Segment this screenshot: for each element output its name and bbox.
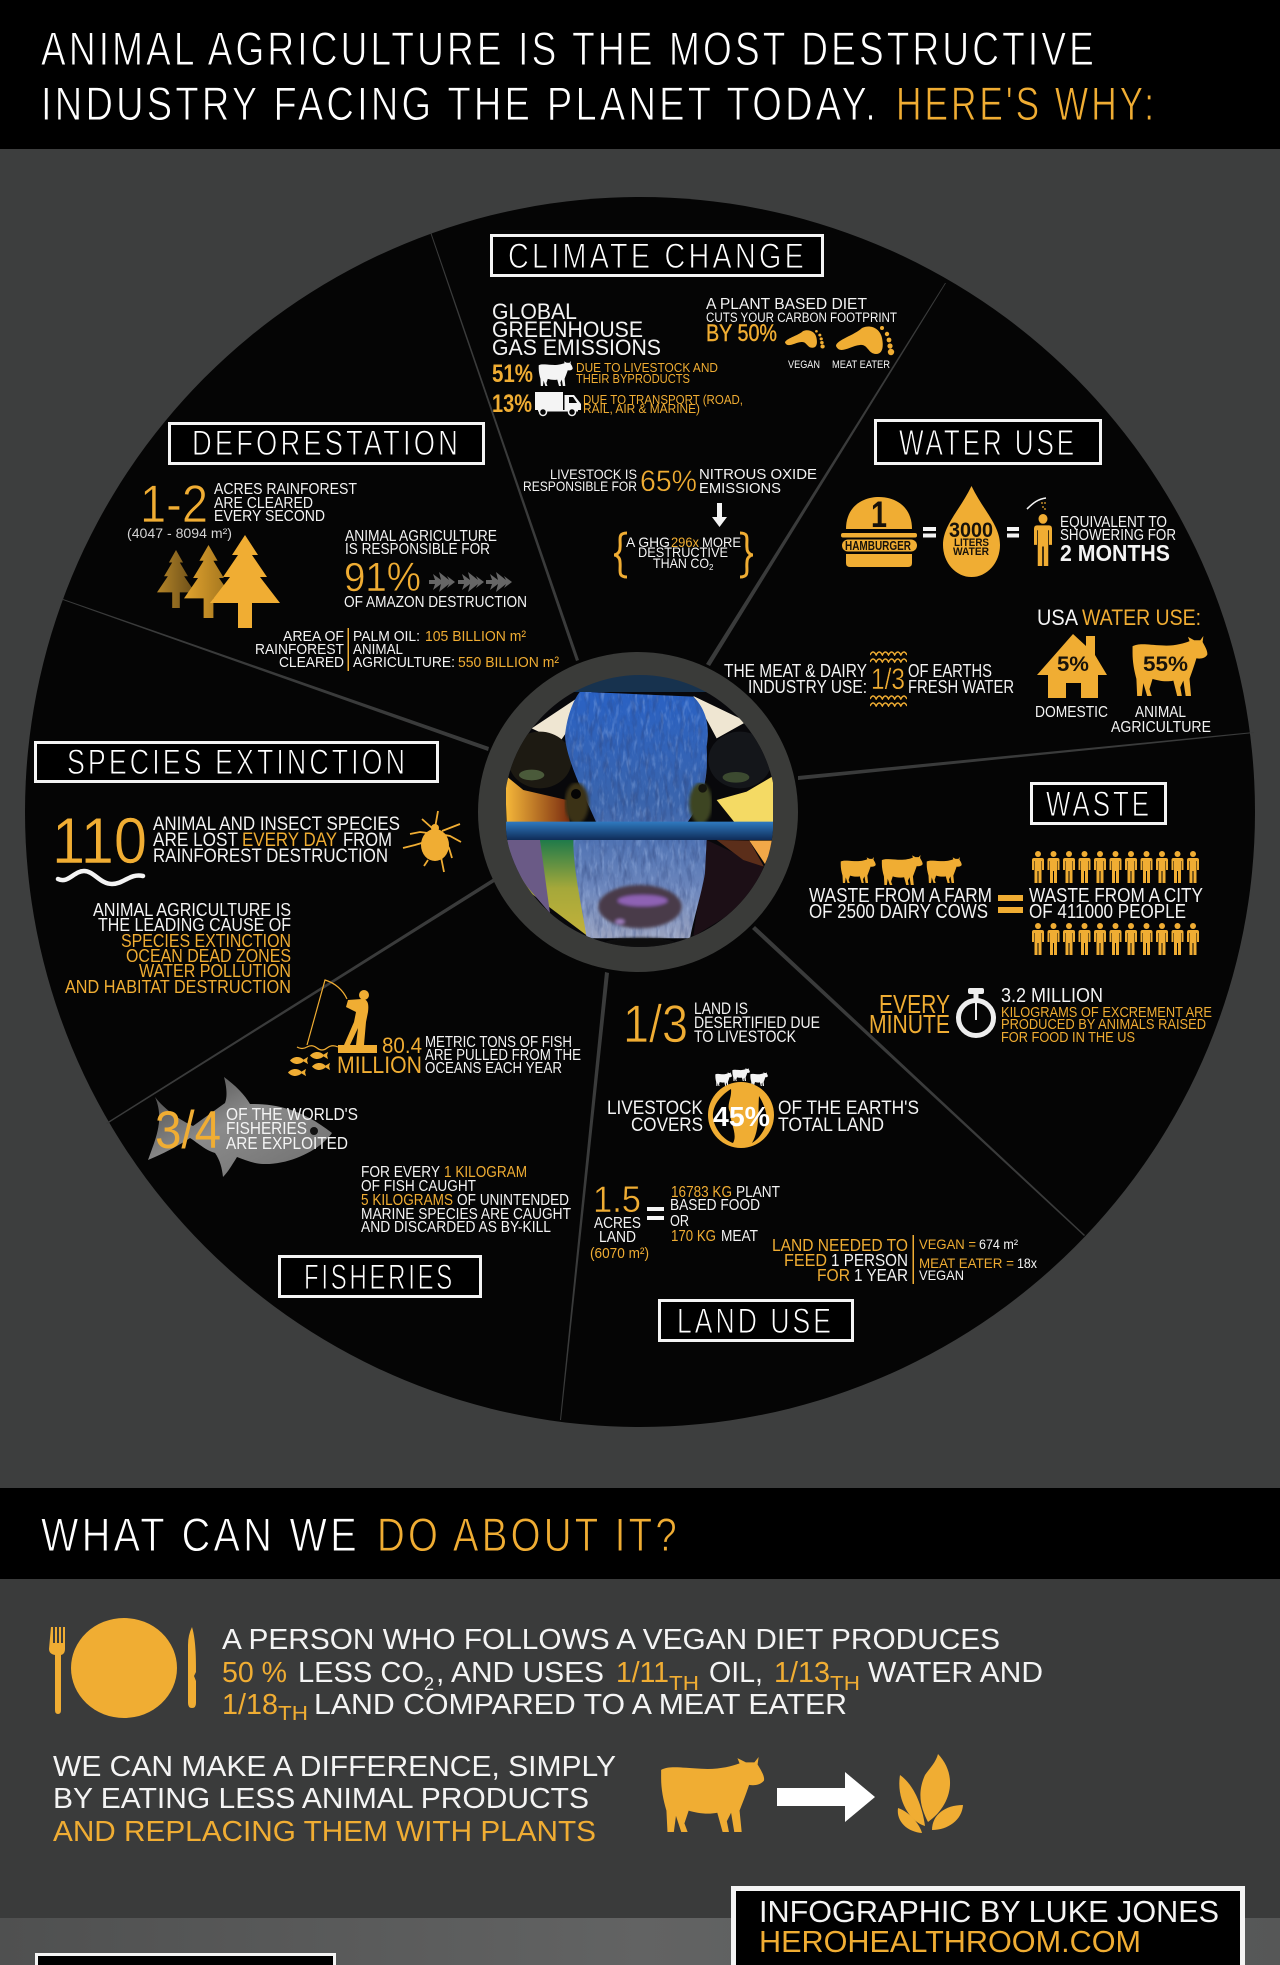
icon: fish with 3/4 stat: FISHERIES [226,1118,307,1138]
text: vegan diet comparison: 2 [424,1674,434,1694]
stat: 110 species: RAINFOREST DESTRUCTION [153,846,388,867]
title highlight: HERE'S WHY: [896,77,1157,130]
text: vegan diet comparison: A PERSON WHO FOLLOWS A VEGAN DIET PRODUCES [222,1624,1000,1656]
stat: 1-2 acres: 1-2 [140,475,208,534]
equals sign [998,895,1023,913]
stat: 1.5 acres: (6070 m²) [590,1245,649,1262]
heading: climate change: CLIMATE CHANGE [508,237,807,276]
equals sign [923,527,936,538]
panel: land use [590,995,1037,1341]
callout: ghg braces: 2 [709,563,714,572]
text: vegan diet comparison: TH [278,1703,308,1725]
stat: 110 species: EVERY DAY [242,830,337,851]
heading: land use: LAND USE [677,1302,834,1341]
stat: 13 percent transport with truck icon: RAIL, AIR & MARINE) [583,402,700,416]
text: every minute: EVERY [879,989,950,1019]
text: make a difference: BY EATING LESS ANIMAL PRODUCTS [53,1783,589,1815]
stat: nitrous oxide [523,465,817,498]
stat: nitrous oxide: RESPONSIBLE FOR [523,478,637,494]
stat: 91 percent amazon: IS RESPONSIBLE FOR [345,541,490,558]
sources box [36,1954,334,1965]
panel: deforestation [127,424,559,671]
text: every minute [869,989,950,1039]
panel: species extinction [36,742,461,997]
stat: 110 species [52,804,400,884]
text: global greenhouse gas emissions [492,299,661,360]
table: land needed to feed one person: FOR [817,1265,850,1285]
icon: fisherman [288,980,377,1076]
labels: domestic and animal agriculture: DOMESTIC [1035,704,1108,721]
stat: 110 species: 110 [52,804,147,877]
text: vegan diet comparison: 50 % [222,1657,287,1689]
table: area of rainforest cleared: 550 BILLION m² [458,654,559,671]
text: plant food or meat: 16783 KG [671,1184,732,1201]
text: by-kill: OF FISH CAUGHT [361,1178,476,1195]
table: land needed to feed one person: FEED [784,1250,827,1270]
stat: 110 species: ANIMAL AND INSECT SPECIES [153,814,400,835]
icon: fish with 3/4 stat: OF THE WORLD'S [226,1104,358,1124]
icon: people rows [1032,851,1199,955]
icon: three cows [841,855,962,885]
stat: 1-2 acres: EVERY SECOND [214,508,325,525]
text: livestock covers: LIVESTOCK [607,1098,703,1119]
stat: 80.4 million: MILLION [337,1052,422,1079]
callout: ghg braces: MORE [702,534,741,550]
table: area of rainforest cleared: PALM OIL: [353,628,420,645]
labels: footprints: VEGAN [788,359,820,371]
background: footer strip [0,1918,1280,1965]
icon: plate with fork and knife [49,1618,196,1718]
text: by-kill: MARINE SPECIES ARE CAUGHT [361,1206,571,1223]
stat: one third fresh water: THE MEAT & DAIRY [724,661,867,681]
labels: domestic and animal agriculture [1035,704,1211,736]
labels: domestic and animal agriculture: ANIMAL [1135,704,1186,721]
stat: one third fresh water: FRESH WATER [908,677,1014,697]
text: by-kill: 1 KILOGRAM [444,1164,527,1181]
text: plant based diet: A PLANT BASED DIET [706,296,867,313]
icon: fish with 3/4 stat: ARE EXPLOITED [226,1133,348,1153]
equals sign [1007,527,1019,538]
text: 3.2 million kilograms: FOR FOOD IN THE US [1001,1029,1135,1046]
stat: nitrous oxide: 65% [640,465,697,498]
background: action section [0,1579,1280,1918]
table: land needed to feed one person: 1 YEAR [854,1265,908,1285]
text: leading cause list [65,899,291,997]
text: vegan diet comparison: LESS CO [298,1657,424,1689]
text: leading cause list: OCEAN DEAD ZONES [126,945,291,966]
icon: footprints [785,326,894,355]
stat: 1.5 acres: 1.5 [593,1179,641,1220]
text: make a difference [53,1751,616,1848]
credit box [734,1888,1242,1965]
title line two: INDUSTRY FACING THE PLANET TODAY. [41,77,879,130]
text: vegan diet comparison [222,1624,1043,1725]
credit box: INFOGRAPHIC BY LUKE JONES [759,1894,1219,1929]
heading: species extinction: SPECIES EXTINCTION [67,743,408,782]
table: area of rainforest cleared: 105 BILLION m² [425,628,526,645]
table: area of rainforest cleared: ANIMAL [353,641,403,658]
icon: globe with cows and 45 percent [708,1068,774,1148]
table: land needed to feed one person [772,1235,1037,1285]
text: plant food or meat: MEAT [721,1228,758,1245]
stat: one third desertified: TO LIVESTOCK [694,1028,796,1046]
table: area of rainforest cleared: AGRICULTURE: [353,654,455,671]
text: equivalent showering: EQUIVALENT TO [1060,514,1167,531]
stat: 1-2 acres: (4047 - 8094 m²) [127,525,232,541]
heading: deforestation: DEFORESTATION [192,424,461,463]
stat: 1.5 acres [590,1179,664,1262]
icon: house 5 percent [1037,634,1107,698]
wheel spokes [63,232,1254,1420]
stat: 1-2 acres: ARE CLEARED [214,495,313,512]
text: global greenhouse gas emissions: GREENHOUSE [492,317,643,342]
text: livestock covers [607,1098,919,1136]
text: by-kill: AND DISCARDED AS BY-KILL [361,1219,551,1236]
stat: one third desertified: LAND IS [694,1000,748,1018]
text: plant based diet [706,296,897,347]
table: land needed to feed one person: LAND NEEDED TO [772,1235,908,1255]
table: area of rainforest cleared: RAINFOREST [255,641,344,658]
icon: water drop 3000 liters [943,486,1000,577]
text: equivalent showering: SHOWERING FOR [1060,527,1176,544]
table: land needed to feed one person: 1 PERSON [831,1250,908,1270]
text: plant food or meat: BASED FOOD [670,1197,760,1214]
stat: 80.4 million: ARE PULLED FROM THE [425,1047,581,1064]
callout: ghg braces: A GHG [626,534,670,550]
text: by-kill: FOR EVERY [361,1164,440,1181]
stat: 51 percent livestock: DUE TO LIVESTOCK AND [576,360,718,375]
text: plant food or meat: OR [670,1213,689,1230]
background: main section [0,149,1280,1488]
heading: usa water use [1037,605,1201,630]
text: vegan diet comparison: LAND COMPARED TO A MEAT EATER [314,1689,847,1721]
text: waste from a farm: OF 2500 DAIRY COWS [809,901,988,923]
text: waste from a city: WASTE FROM A CITY [1029,885,1203,907]
heading: fisheries: FISHERIES [304,1258,455,1297]
text: 3.2 million kilograms: 3.2 MILLION [1001,985,1103,1007]
text: plant based diet: CUTS YOUR CARBON FOOTPRINT [706,310,897,325]
credit box: HEROHEALTHROOM.COM [759,1924,1141,1959]
panel: fisheries [148,980,581,1297]
header band [0,0,1280,149]
main black wheel [25,197,1255,1427]
heading: fisheries [280,1256,480,1297]
text: 3.2 million kilograms: KILOGRAMS OF EXCREMENT ARE [1001,1004,1212,1021]
stat: 13 percent transport with truck icon [492,390,743,418]
stat: one third desertified [623,995,820,1054]
text: waste from a farm [809,885,992,923]
labels: footprints: MEAT EATER [832,359,890,371]
table: area of rainforest cleared: AREA OF [283,628,344,645]
text: 3.2 million kilograms [1001,985,1212,1046]
text: by-kill: 5 KILOGRAMS [361,1192,453,1209]
text: equivalent showering [1060,514,1176,566]
stat: nitrous oxide: EMISSIONS [699,480,781,497]
callout: ghg braces: DESTRUCTIVE [638,544,728,560]
stat: 51 percent livestock [492,360,718,388]
text: waste from a farm: WASTE FROM A FARM [809,885,992,907]
icon: cow [661,1757,764,1832]
text: leading cause list: WATER POLLUTION [139,960,291,981]
text: waste from a city [1029,885,1203,923]
icon: hamburger [841,494,917,567]
icon: plant leaves [898,1754,963,1833]
stat: one third desertified: 1/3 [623,995,688,1054]
text: vegan diet comparison: 1/13 [774,1657,830,1689]
heading: waste: WASTE [1046,785,1152,824]
stat: 51 percent livestock: THEIR BYPRODUCTS [576,371,690,386]
table: area of rainforest cleared [255,628,559,671]
labels: footprints [788,359,890,371]
heading: usa water use: WATER USE: [1082,605,1201,630]
stat: 1-2 acres: ACRES RAINFOREST [214,481,357,498]
text: vegan diet comparison: 1/11 [616,1657,669,1689]
stat: 91 percent amazon: 91% [344,554,421,600]
text: leading cause list: THE LEADING CAUSE OF [98,914,291,935]
text: vegan diet comparison: 1/18 [222,1689,278,1721]
arrow: down [712,503,727,527]
text: by-kill: OF UNINTENDED [457,1192,569,1209]
text: make a difference: AND REPLACING THEM WITH PLANTS [53,1816,596,1848]
text: plant food or meat: PLANT [736,1184,780,1201]
icon: stopwatch [958,988,994,1036]
stat: 91 percent amazon [344,528,527,611]
labels: domestic and animal agriculture: AGRICULTURE [1111,719,1211,736]
text: every minute: MINUTE [869,1009,950,1039]
stat: 80.4 million: 80.4 [382,1033,422,1058]
text: plant based diet: BY 50% [706,320,777,347]
section heading band: what can we do [0,1488,1280,1579]
panel: water use [724,420,1211,736]
panel: climate change [492,236,897,577]
icon: insect [403,811,461,872]
section heading band: what can we do: WHAT CAN WE [41,1508,360,1561]
stat: 13 percent transport with truck icon: DUE TO TRANSPORT (ROAD, [583,393,743,407]
text: vegan diet comparison: WATER AND [868,1657,1043,1689]
icon: fish with 3/4 stat: 3/4 [155,1101,221,1160]
table: land needed to feed one person: VEGAN = [919,1236,976,1252]
stat: 91 percent amazon: ANIMAL AGRICULTURE [345,528,497,545]
table: land needed to feed one person: MEAT EATER = [919,1255,1014,1271]
text: vegan diet comparison: TH [669,1673,699,1695]
text: livestock covers: COVERS [631,1115,703,1136]
callout: ghg braces: 296x [671,534,699,550]
text: vegan diet comparison: , AND USES [436,1657,604,1689]
stat: 80.4 million: OCEANS EACH YEAR [425,1060,562,1077]
text: leading cause list: AND HABITAT DESTRUCTION [65,976,291,997]
text: equivalent showering: 2 MONTHS [1060,540,1170,566]
icon: hamburger: 1 [871,494,887,535]
stat: 91 percent amazon: OF AMAZON DESTRUCTION [344,594,527,611]
stat: 1-2 acres [127,475,357,541]
text: make a difference: WE CAN MAKE A DIFFERENCE, SIMPLY [53,1751,616,1783]
heading: water use: WATER USE [899,422,1077,463]
stat: 13 percent transport with truck icon: 13% [492,390,532,418]
table: land needed to feed one person: 18x [1017,1255,1037,1271]
text: leading cause list: SPECIES EXTINCTION [121,930,291,951]
stat: 110 species: FROM [343,830,392,851]
text: plant food or meat: 170 KG [671,1228,716,1245]
callout: ghg braces: THAN CO [653,555,709,571]
text: by-kill [361,1164,571,1236]
text: global greenhouse gas emissions: GLOBAL [492,299,577,324]
text: vegan diet comparison: TH [830,1673,860,1695]
stat: one third fresh water [724,652,1014,706]
icon: cow 55 percent [1133,636,1207,696]
callout: ghg braces [614,533,753,577]
icon: water drop 3000 liters: WATER [953,546,989,558]
stat: 1.5 acres: LAND [599,1229,636,1246]
text: plant food or meat [670,1184,780,1245]
text: waste from a city: OF 411000 PEOPLE [1029,901,1186,923]
center photo: cow behind fence [478,652,798,972]
table: land needed to feed one person: VEGAN [919,1267,964,1283]
text: global greenhouse gas emissions: GAS EMISSIONS [492,335,661,360]
text: livestock covers: TOTAL LAND [778,1115,884,1136]
text: leading cause list: ANIMAL AGRICULTURE IS [93,899,291,920]
text: vegan diet comparison: OIL, [709,1657,763,1689]
stat: one third fresh water: INDUSTRY USE: [748,677,867,697]
text: 3.2 million kilograms: PRODUCED BY ANIMALS RAISED [1001,1016,1206,1033]
arrow: cow to plant [777,1772,875,1822]
stat: 80.4 million [337,1033,581,1079]
stat: one third fresh water: OF EARTHS [908,661,992,681]
stat: one third fresh water: 1/3 [871,663,905,696]
icon: hamburger: HAMBURGER [845,539,911,553]
icon: trees [157,535,280,628]
heading: usa water use: USA [1037,605,1078,630]
icon: cow 55 percent: 55% [1143,653,1188,676]
icon: showering person [1027,498,1052,566]
icon: fish with 3/4 stat [148,1077,358,1177]
table: land needed to feed one person: 674 m² [979,1236,1018,1252]
panel: waste [809,784,1212,1046]
stat: 80.4 million: METRIC TONS OF FISH [425,1034,572,1051]
stat: 1.5 acres: ACRES [594,1215,641,1232]
stat: nitrous oxide: NITROUS OXIDE [699,466,817,483]
section heading band: what can we do: DO ABOUT IT? [377,1508,680,1561]
icon: globe with cows and 45 percent: 45% [713,1101,770,1132]
text: livestock covers: OF THE EARTH'S [778,1098,919,1119]
stat: one third desertified: DESERTIFIED DUE [694,1014,820,1032]
table: area of rainforest cleared: CLEARED [279,654,344,671]
stat: 51 percent livestock: 51% [492,360,533,388]
icon: house 5 percent: 5% [1057,653,1089,676]
icon: water drop 3000 liters: 3000 [949,519,993,542]
icon: water drop 3000 liters: LITERS [954,537,989,549]
stat: nitrous oxide: LIVESTOCK IS [550,466,637,482]
stat: 110 species: ARE LOST [153,830,238,851]
